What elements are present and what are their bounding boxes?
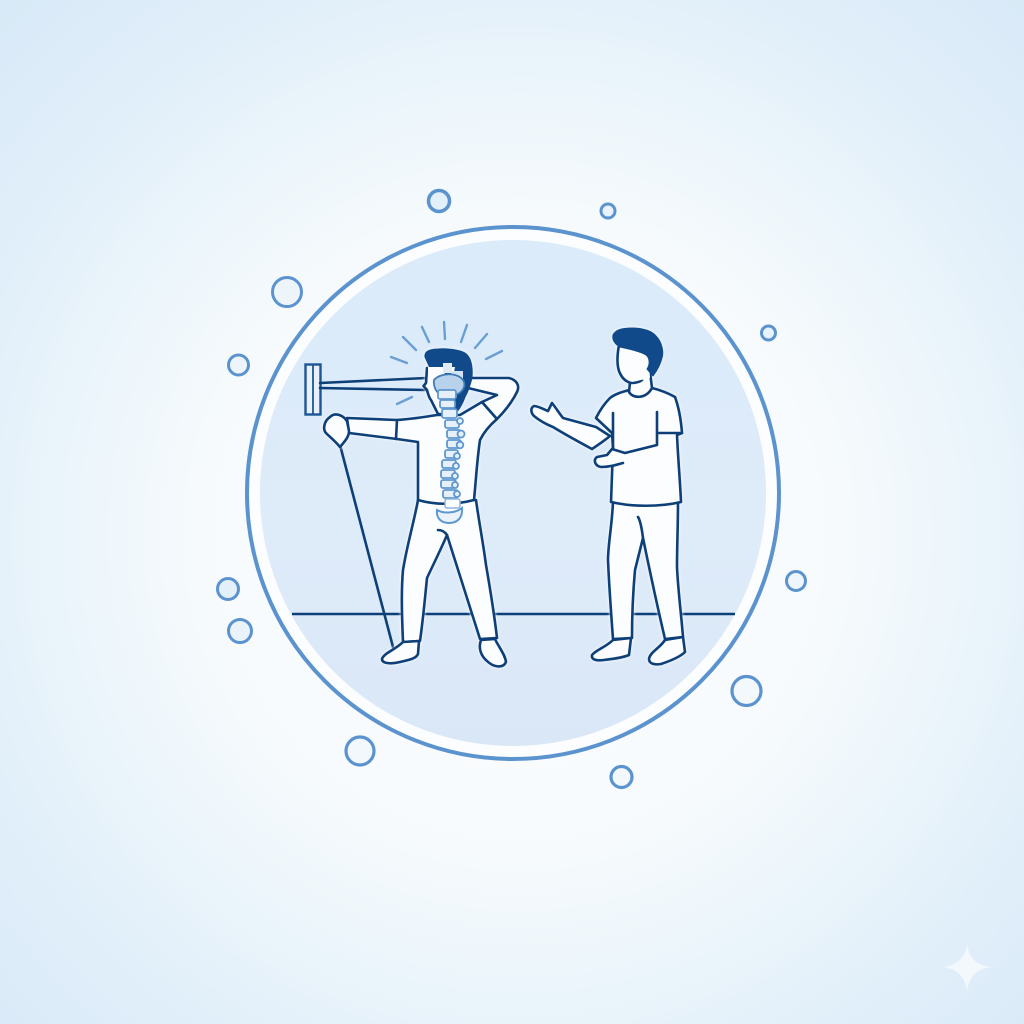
- therapist reaching arm and hand: [531, 403, 610, 449]
- patient face: [424, 368, 446, 414]
- therapist hair: [613, 328, 663, 376]
- wall anchor with two bands: [306, 364, 426, 414]
- spine: [434, 363, 464, 523]
- pain rays around head: [391, 322, 502, 404]
- patient figure: [324, 349, 518, 666]
- patient raised arm: [466, 378, 518, 419]
- patient hair back: [425, 349, 472, 412]
- therapist right foot: [649, 637, 685, 664]
- pelvis: [437, 508, 462, 523]
- floating bubbles: [218, 190, 806, 788]
- therapist shirt: [596, 388, 682, 506]
- floor line: [292, 613, 735, 615]
- therapist figure: [531, 328, 685, 664]
- therapist left foot: [592, 638, 631, 660]
- patient right foot: [480, 639, 506, 666]
- sparkle watermark: [943, 944, 991, 991]
- patient left foot: [382, 641, 419, 663]
- patient fist: [324, 414, 349, 447]
- resistance band to floor: [340, 445, 393, 647]
- patient legs: [402, 500, 497, 642]
- therapist face: [618, 345, 642, 383]
- main circle frame: [247, 227, 779, 759]
- spine side processes: [452, 418, 464, 497]
- therapist legs: [608, 502, 683, 639]
- patient torso and extended arm: [347, 402, 497, 504]
- therapist collar: [629, 372, 652, 397]
- therapist lower arm and hand: [595, 441, 670, 467]
